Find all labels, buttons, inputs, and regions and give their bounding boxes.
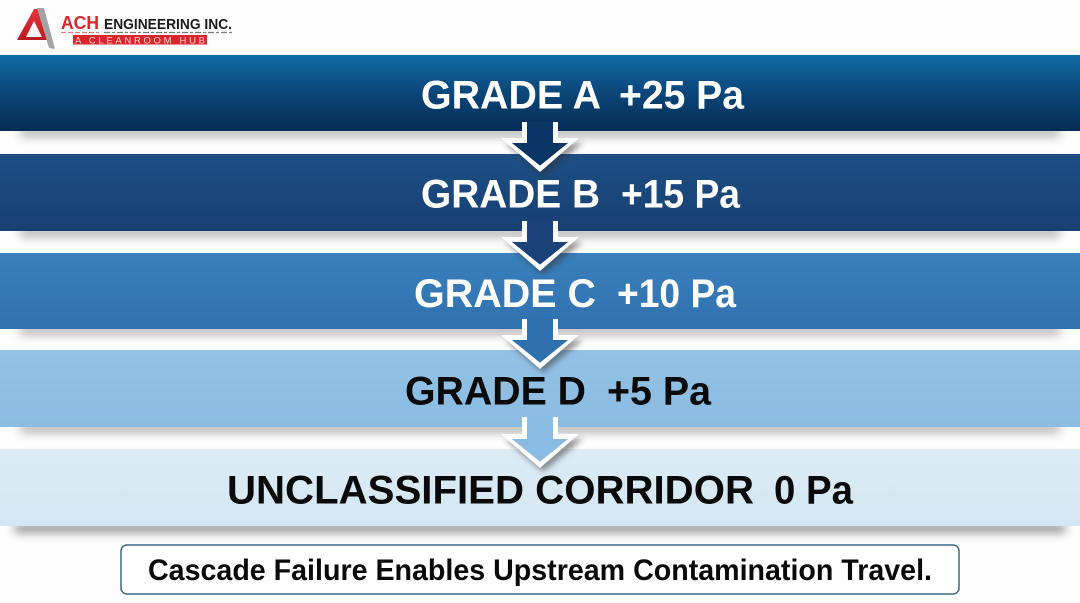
panel: Grade B +15 Pa: +15 Pa xyxy=(621,172,741,216)
panel: Unclassified Corridor 0 Pa xyxy=(0,449,1080,532)
panel: Grade A +25 Pa xyxy=(0,55,1080,136)
arrow: Grade D to Corridor xyxy=(501,417,583,472)
arrow: Grade B to Grade C xyxy=(501,221,583,275)
callout: cascade failure warning: Cascade Failure Enables Upstream Contamination Travel. xyxy=(148,554,932,587)
panel: Grade A +25 Pa: +25 Pa xyxy=(619,74,745,118)
panel: Unclassified Corridor 0 Pa: UNCLASSIFIED CORRIDOR xyxy=(227,468,754,512)
panel: Grade C +10 Pa xyxy=(0,253,1080,334)
panel: Unclassified Corridor 0 Pa: 0 Pa xyxy=(774,468,854,512)
callout: cascade failure warning xyxy=(121,545,959,594)
panel: Grade A +25 Pa: GRADE A xyxy=(421,74,601,118)
icon: triangle logo mark xyxy=(17,8,55,49)
panel: Grade C +10 Pa: +10 Pa xyxy=(617,272,737,316)
ghosted rule under company name xyxy=(61,32,232,34)
panel: Grade B +15 Pa: GRADE B xyxy=(421,172,600,216)
arrow: Grade A to Grade B xyxy=(501,122,583,176)
logo: ACH Engineering Inc. xyxy=(17,8,232,49)
panel: Grade D +5 Pa: +5 Pa xyxy=(607,370,712,414)
panel: Grade D +5 Pa xyxy=(0,350,1080,432)
company name: ACH xyxy=(61,12,99,33)
panel: Grade D +5 Pa: GRADE D xyxy=(405,370,586,414)
arrow: Grade C to Grade D xyxy=(501,319,583,373)
panel: Grade C +10 Pa: GRADE C xyxy=(414,272,596,316)
panel: Grade B +15 Pa xyxy=(0,154,1080,236)
tagline: a cleanroom hub: A CLEANROOM HUB xyxy=(75,36,205,46)
logo: ACH Engineering Inc.: ENGINEERING INC. xyxy=(104,17,232,33)
